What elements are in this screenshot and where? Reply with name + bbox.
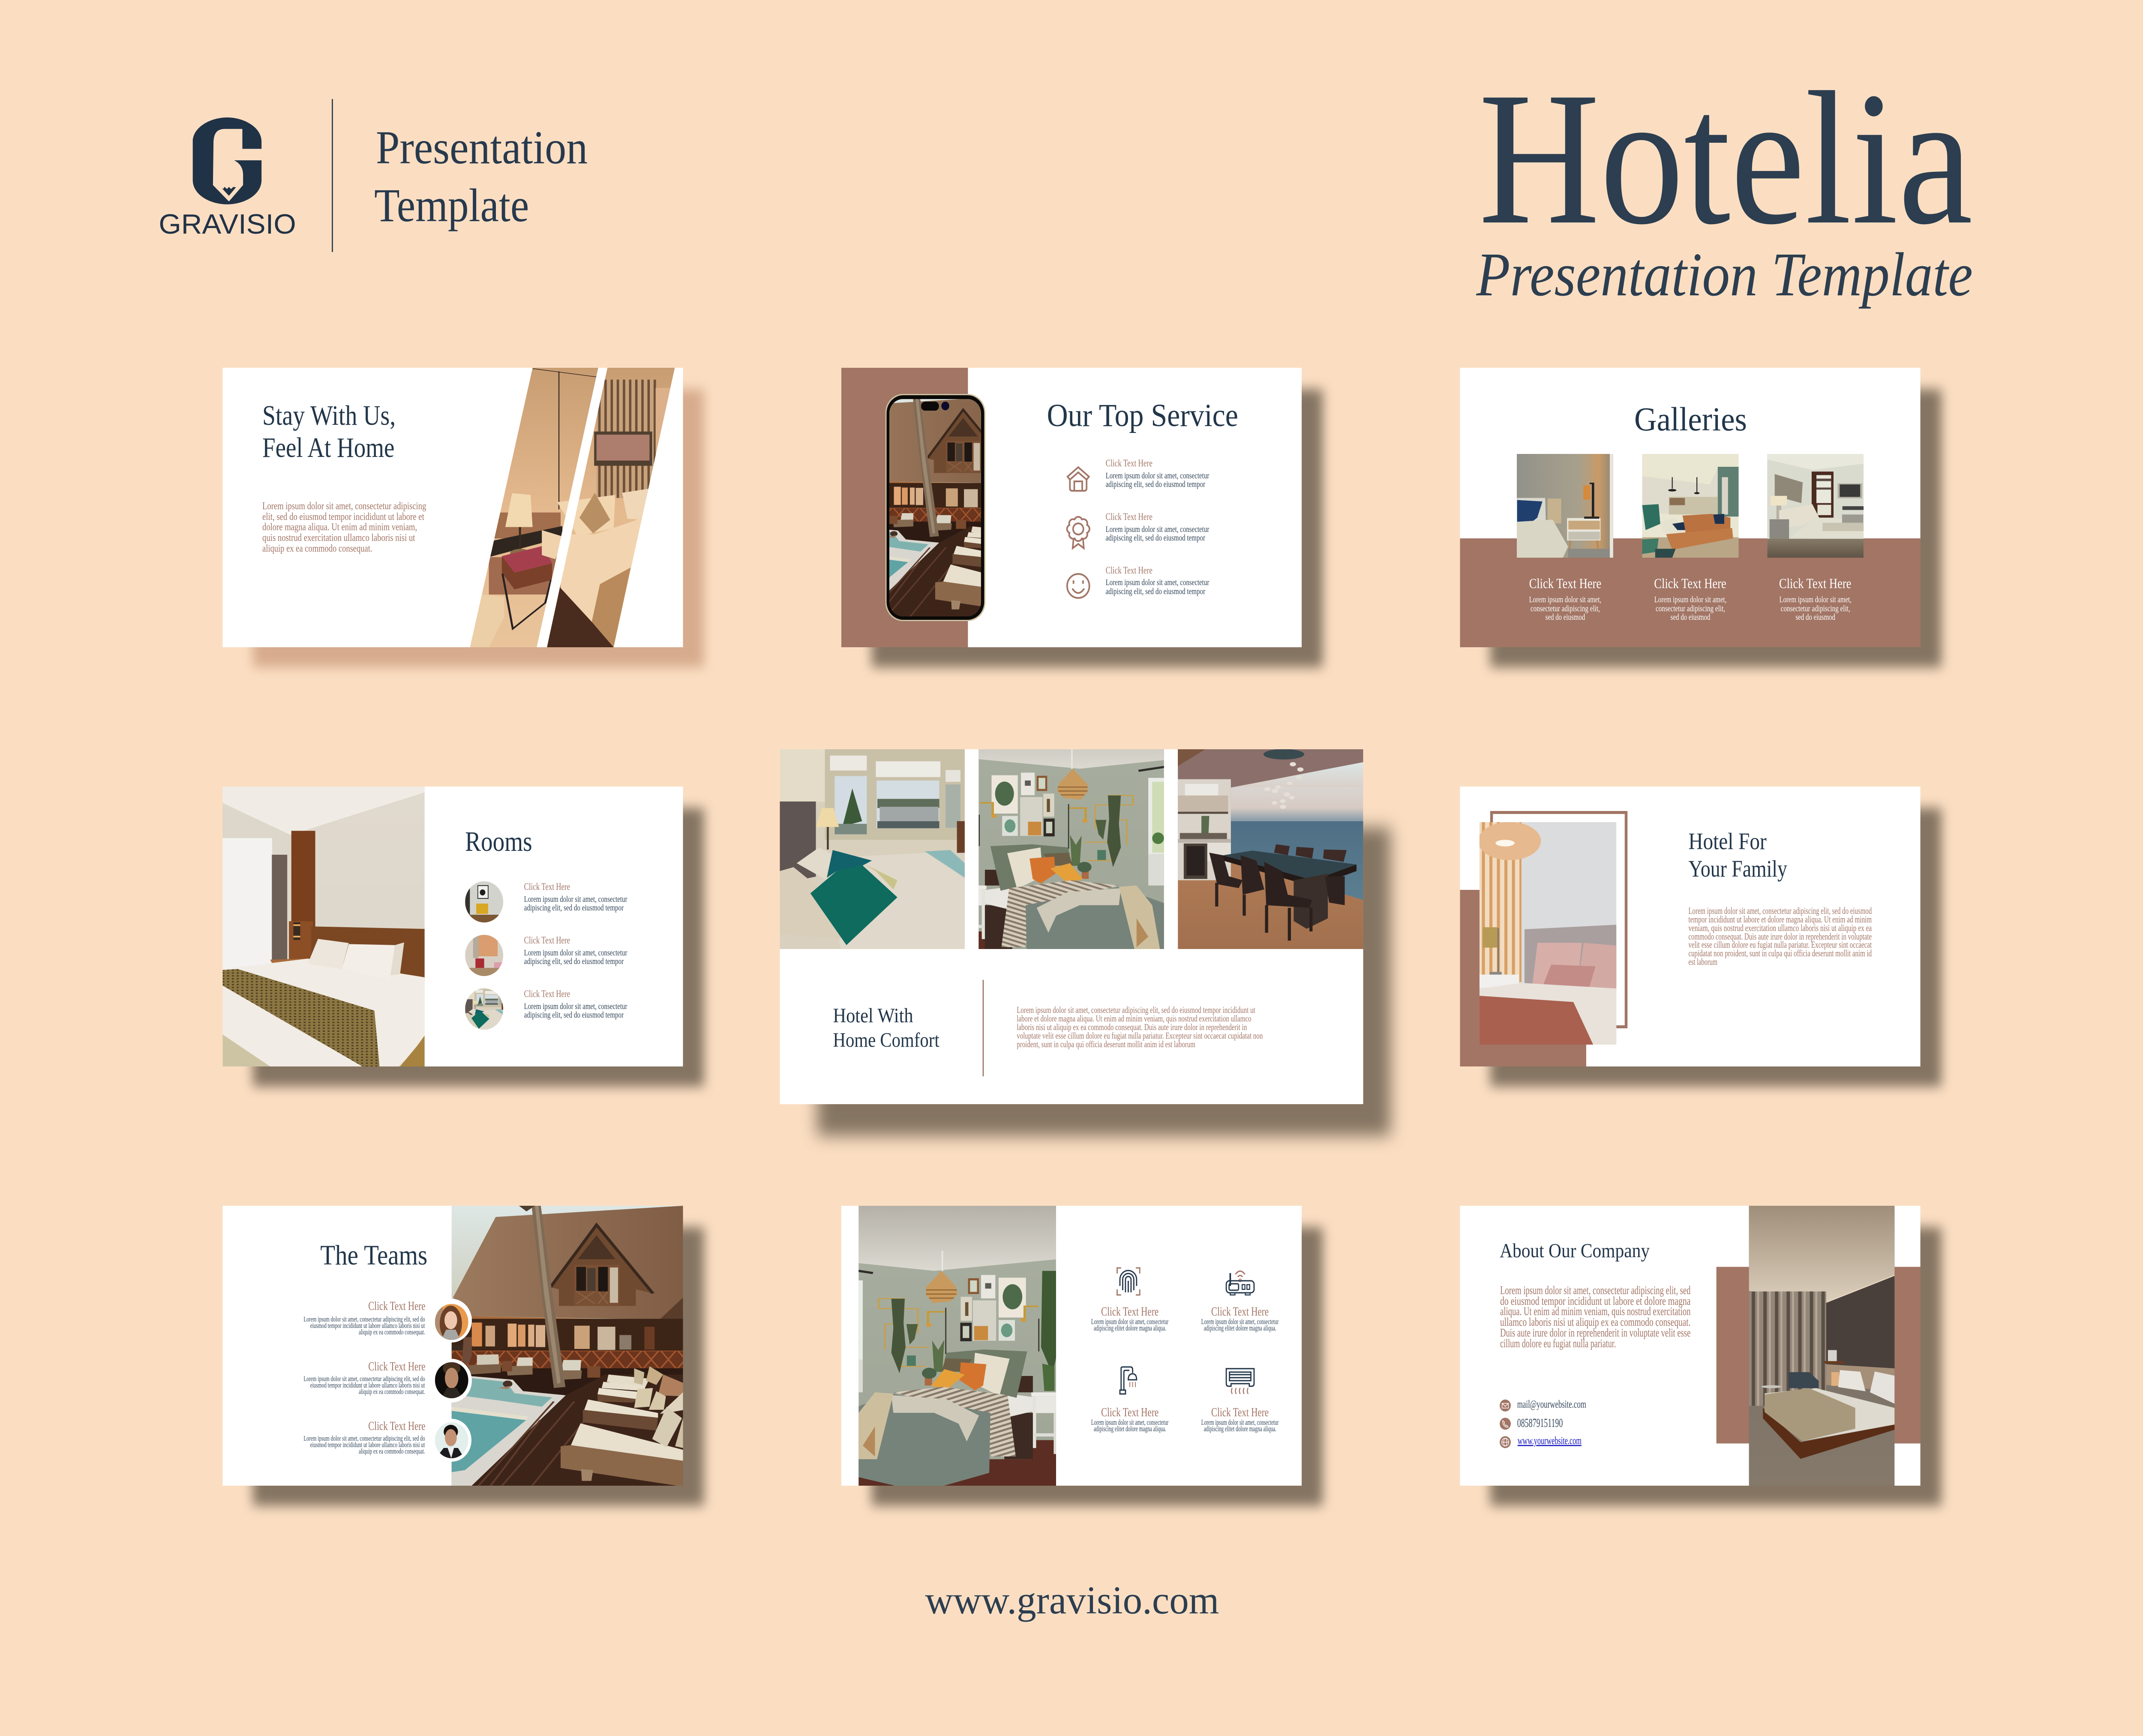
rooms heading: Rooms [465,826,532,857]
amenity text 2 [1201,1305,1279,1332]
slide 9 body text: aliqua. Ut enim ad minim veniam, quis nostrud exercitation [1500,1305,1690,1318]
slide 7: The Teams [222,1200,704,1506]
team text 3: eiusmod tempor incididunt ut labore ullamco laboris nisi ut [310,1440,425,1449]
slide 9 body text: Duis aute irure dolor in reprehenderit in voluptate velit esse [1500,1326,1690,1339]
slide 3: Galleries [1460,368,1942,667]
slide 5: Hotel With Home Comfort [780,703,1390,1136]
slide 6 heading [1688,829,1787,882]
amenity text 2: adipiscing elitet dolore magna aliqua. [1204,1324,1276,1332]
service 3 text [1106,565,1210,596]
service 2 text: adipiscing elit, sed do eiusmod tempor [1106,533,1205,543]
icon: router [1226,1271,1254,1295]
slide 4: Rooms [222,787,704,1087]
service 1 text [1106,457,1210,489]
slide 1 heading: Stay With Us, [262,399,396,431]
slide 2 heading: Our Top Service [1047,398,1238,433]
service 2 text [1106,511,1210,543]
room thumbnail 1 [465,881,503,922]
photo: green bedroom [954,703,1172,981]
slide 5 body text: laboris nisi ut aliquip ex ea commodo consequat. Duis aute irure dolor in reprehenderit in [1017,1022,1247,1032]
service 1 text: Lorem ipsum dolor sit amet, consectetur [1106,471,1210,481]
amenity text 1: Click Text Here [1101,1305,1159,1319]
amenity text 3: Click Text Here [1101,1406,1159,1419]
amenity text 4 [1201,1406,1279,1433]
subtitle: Presentation Template: Presentation [376,121,588,174]
slide 9 body text: Lorem ipsum dolor sit amet, consectetur adipiscing elit, sed [1500,1284,1690,1297]
resort photo [438,1200,697,1497]
slide 6: Hotel For Your Family [1460,787,1942,1087]
team text 2: Lorem ipsum dolor sit amet, consectetur adipiscing elit, sed do [303,1374,425,1383]
icon: fingerprint [1117,1268,1140,1295]
amenity text 3: Lorem ipsum dolor sit amet, consectetur [1091,1418,1169,1427]
slide 9 heading: About Our Company [1500,1239,1650,1261]
room text 2 [524,934,627,966]
team text 3 [303,1419,426,1455]
slide 6 body text [1688,905,1872,967]
slide 6 heading: Your Family [1688,856,1787,882]
team text 3: Click Text Here [368,1419,426,1433]
slide 6 photo [1478,822,1616,1045]
icon: rosette [1067,517,1090,548]
icon: globe [1500,1436,1511,1448]
slide 5 body text: labore et dolore magna aliqua. Ut enim ad minim veniam, quis nostrud exercitation ullamco [1017,1014,1251,1024]
team text 3: Lorem ipsum dolor sit amet, consectetur adipiscing elit, sed do [303,1434,425,1442]
team text 1: Click Text Here [368,1299,426,1313]
service 1 text: adipiscing elit, sed do eiusmod tempor [1106,480,1205,489]
team text 1: eiusmod tempor incididunt ut labore ullamco laboris nisi ut [310,1321,425,1330]
slide 9: About Our Company [1460,1206,1942,1506]
slide 5 body text [1017,1005,1263,1049]
contact: website: www.yourwebsite.com [1518,1435,1582,1447]
subtitle: Presentation Template: Template [374,179,529,231]
slide 7 heading: The Teams [320,1239,427,1271]
gallery captions: consectetur adipiscing elit, [1781,604,1850,613]
slide 6 body text: tempor incididunt ut labore et dolore magna aliqua. Ut enim ad minim [1688,914,1872,925]
slide 1 body text: dolore magna aliqua. Ut enim ad minim veniam, [262,521,417,533]
room text 3: adipiscing elit, sed do eiusmod tempor [524,1010,624,1020]
slide 9 photo [1749,1206,1894,1486]
gallery captions: consectetur adipiscing elit, [1656,604,1725,613]
phone mockup [839,390,1042,622]
slide 9 body text [1500,1284,1691,1350]
service 3 text: Lorem ipsum dolor sit amet, consectetur [1106,578,1210,587]
slide 1 body text: quis nostrud exercitation ullamco laboris nisi ut [262,532,415,544]
footer website: www.gravisio.com [925,1579,1219,1622]
room thumbnail 2 [465,935,504,976]
contact: mail: mail@yourwebsite.com [1517,1399,1586,1410]
gallery captions: Click Text Here [1654,576,1726,591]
amenity text 2: Click Text Here [1211,1305,1269,1319]
photo: teal pillows bedroom [780,749,965,949]
gallery photo 3 [1767,454,1864,558]
room text 2: Lorem ipsum dolor sit amet, consectetur [524,948,627,958]
slide 6 body text: velit esse cillum dolore eu fugiat nulla pariatur. Excepteur sint occaecat [1688,939,1872,950]
room text 3: Lorem ipsum dolor sit amet, consectetur [524,1002,627,1011]
amenity text 3 [1091,1406,1169,1433]
photo: sea view dining room [1178,749,1363,949]
amenity text 1: adipiscing elitet dolore magna aliqua. [1094,1324,1166,1332]
slide 5 heading: Hotel With [833,1004,913,1027]
contact: phone: 085879151190 [1517,1416,1563,1430]
gallery photo 1 [1517,454,1613,558]
green bedroom photo [838,1203,1065,1492]
room text 1 [524,881,627,913]
service 2 text: Click Text Here [1106,511,1153,522]
room text 1: adipiscing elit, sed do eiusmod tempor [524,903,624,913]
slide 6 body text: veniam, quis nostrud exercitation ullamco laboris nisi ut aliquip ex ea [1688,922,1872,933]
amenity text 2: Lorem ipsum dolor sit amet, consectetur [1201,1317,1279,1326]
slide 6 heading: Hotel For [1688,829,1767,854]
team text 1 [303,1299,426,1336]
slide 1 heading [262,399,396,463]
subtitle: Presentation Template [374,121,588,231]
slide 8: amenities [838,1203,1323,1506]
slide 1 body text: Lorem ipsum dolor sit amet, consectetur adipiscing [262,500,426,512]
room text 1: Click Text Here [524,881,570,892]
gallery photo 2 [1642,454,1738,558]
gallery captions: Click Text Here [1529,576,1601,591]
icon: mail [1500,1400,1511,1412]
gallery captions: Lorem ipsum dolor sit amet, [1654,595,1726,604]
gallery captions: consectetur adipiscing elit, [1531,604,1600,613]
gallery captions [1529,576,1852,622]
slide 5 heading [833,1004,939,1051]
slide 5 body text: proident, sunt in culpa qui officia deserunt mollit anim id est laborum [1017,1039,1195,1049]
slide 1 slanted photo [465,368,684,647]
slide 6 body text: Lorem ipsum dolor sit amet, consectetur adipiscing elit, sed do eiusmod [1688,905,1872,916]
amenity text 1 [1091,1305,1169,1332]
slide 5 body text: voluptate velit esse cillum dolore eu fugiat nulla pariatur. Excepteur sint occaecat cupidatat non [1017,1031,1263,1041]
service 2 text: Lorem ipsum dolor sit amet, consectetur [1106,525,1210,534]
gallery captions: sed do eiusmod [1671,613,1711,622]
icon: shower [1120,1367,1137,1394]
icon: air conditioner [1226,1369,1254,1394]
rooms main photo [222,787,425,1066]
slide 1 body text [262,500,426,554]
slide 1 heading: Feel At Home [262,432,394,463]
room text 2: Click Text Here [524,934,570,946]
slide 1 body text: elit, sed do eiusmod tempor incididunt ut labore et [262,511,424,523]
slide 6 body text: est laborum [1688,956,1717,967]
icon: smile [1067,574,1090,598]
gallery captions: Lorem ipsum dolor sit amet, [1779,595,1852,604]
slide 9 body text: cillum dolore eu fugiat nulla pariatur. [1500,1337,1616,1350]
slide 1 body text: aliquip ex ea commodo consequat. [262,543,372,554]
slide 1: Stay With Us [222,368,704,667]
amenity text 4: Click Text Here [1211,1406,1269,1419]
team text 2: eiusmod tempor incididunt ut labore ullamco laboris nisi ut [310,1381,425,1389]
team text 1: aliquip ex ea commodo consequat. [359,1328,425,1336]
team text 2: aliquip ex ea commodo consequat. [359,1387,425,1396]
slide 5 body text: Lorem ipsum dolor sit amet, consectetur adipiscing elit, sed do eiusmod tempor incididunt ut [1017,1005,1255,1015]
room text 1: Lorem ipsum dolor sit amet, consectetur [524,895,627,904]
amenity text 3: adipiscing elitet dolore magna aliqua. [1094,1424,1166,1433]
slide 5 divider [983,980,984,1076]
logo: Gravisio: GRAVISIO [159,209,296,240]
amenity text 1: Lorem ipsum dolor sit amet, consectetur [1091,1317,1169,1326]
slide 9 body text: do eiusmod tempor incididunt ut labore et dolore magna [1500,1294,1691,1307]
slide 2: Our Top Service [839,368,1323,667]
gallery captions: Lorem ipsum dolor sit amet, [1529,595,1601,604]
slide 5 heading: Home Comfort [833,1029,939,1051]
gallery captions: sed do eiusmod [1546,613,1585,622]
service 1 text: Click Text Here [1106,457,1153,469]
photo frame [1492,813,1626,1027]
room text 3: Click Text Here [524,988,570,999]
slide 6 body text: cupidatat non proident, sunt in culpa qui officia deserunt mollit anim id [1688,948,1872,958]
room thumbnail 3 [465,988,503,1030]
team text 3: aliquip ex ea commodo consequat. [359,1447,425,1455]
slide 9 body text: ullamco laboris nisi ut aliquip ex ea commodo consequat. [1500,1316,1690,1328]
gallery captions: sed do eiusmod [1795,613,1835,622]
subtitle italic: Presentation Template: Presentation Template [1476,240,1973,309]
amenity text 4: adipiscing elitet dolore magna aliqua. [1204,1424,1276,1433]
title: Hotelia: Hotelia [1479,53,1973,264]
team text 1: Lorem ipsum dolor sit amet, consectetur adipiscing elit, sed do [303,1315,425,1323]
service 3 text: Click Text Here [1106,565,1153,576]
logo: Gravisio [159,117,296,240]
icon: phone [1500,1418,1511,1430]
gallery captions: Click Text Here [1779,576,1851,591]
team portrait 3 [432,1419,471,1462]
team portrait 2 [431,1359,472,1403]
team text 2 [303,1360,426,1396]
room text 3 [524,988,627,1020]
slide 6 body text: commodo consequat. Duis aute irure dolor in reprehenderit in voluptate [1688,931,1872,942]
logo divider [332,99,333,252]
team text 2: Click Text Here [368,1360,426,1373]
room text 2: adipiscing elit, sed do eiusmod tempor [524,957,624,966]
team portrait 1 [431,1299,472,1343]
service 3 text: adipiscing elit, sed do eiusmod tempor [1106,587,1205,596]
amenity text 4: Lorem ipsum dolor sit amet, consectetur [1201,1418,1279,1427]
slide 3 heading: Galleries [1634,401,1747,438]
icon: house [1068,467,1089,491]
